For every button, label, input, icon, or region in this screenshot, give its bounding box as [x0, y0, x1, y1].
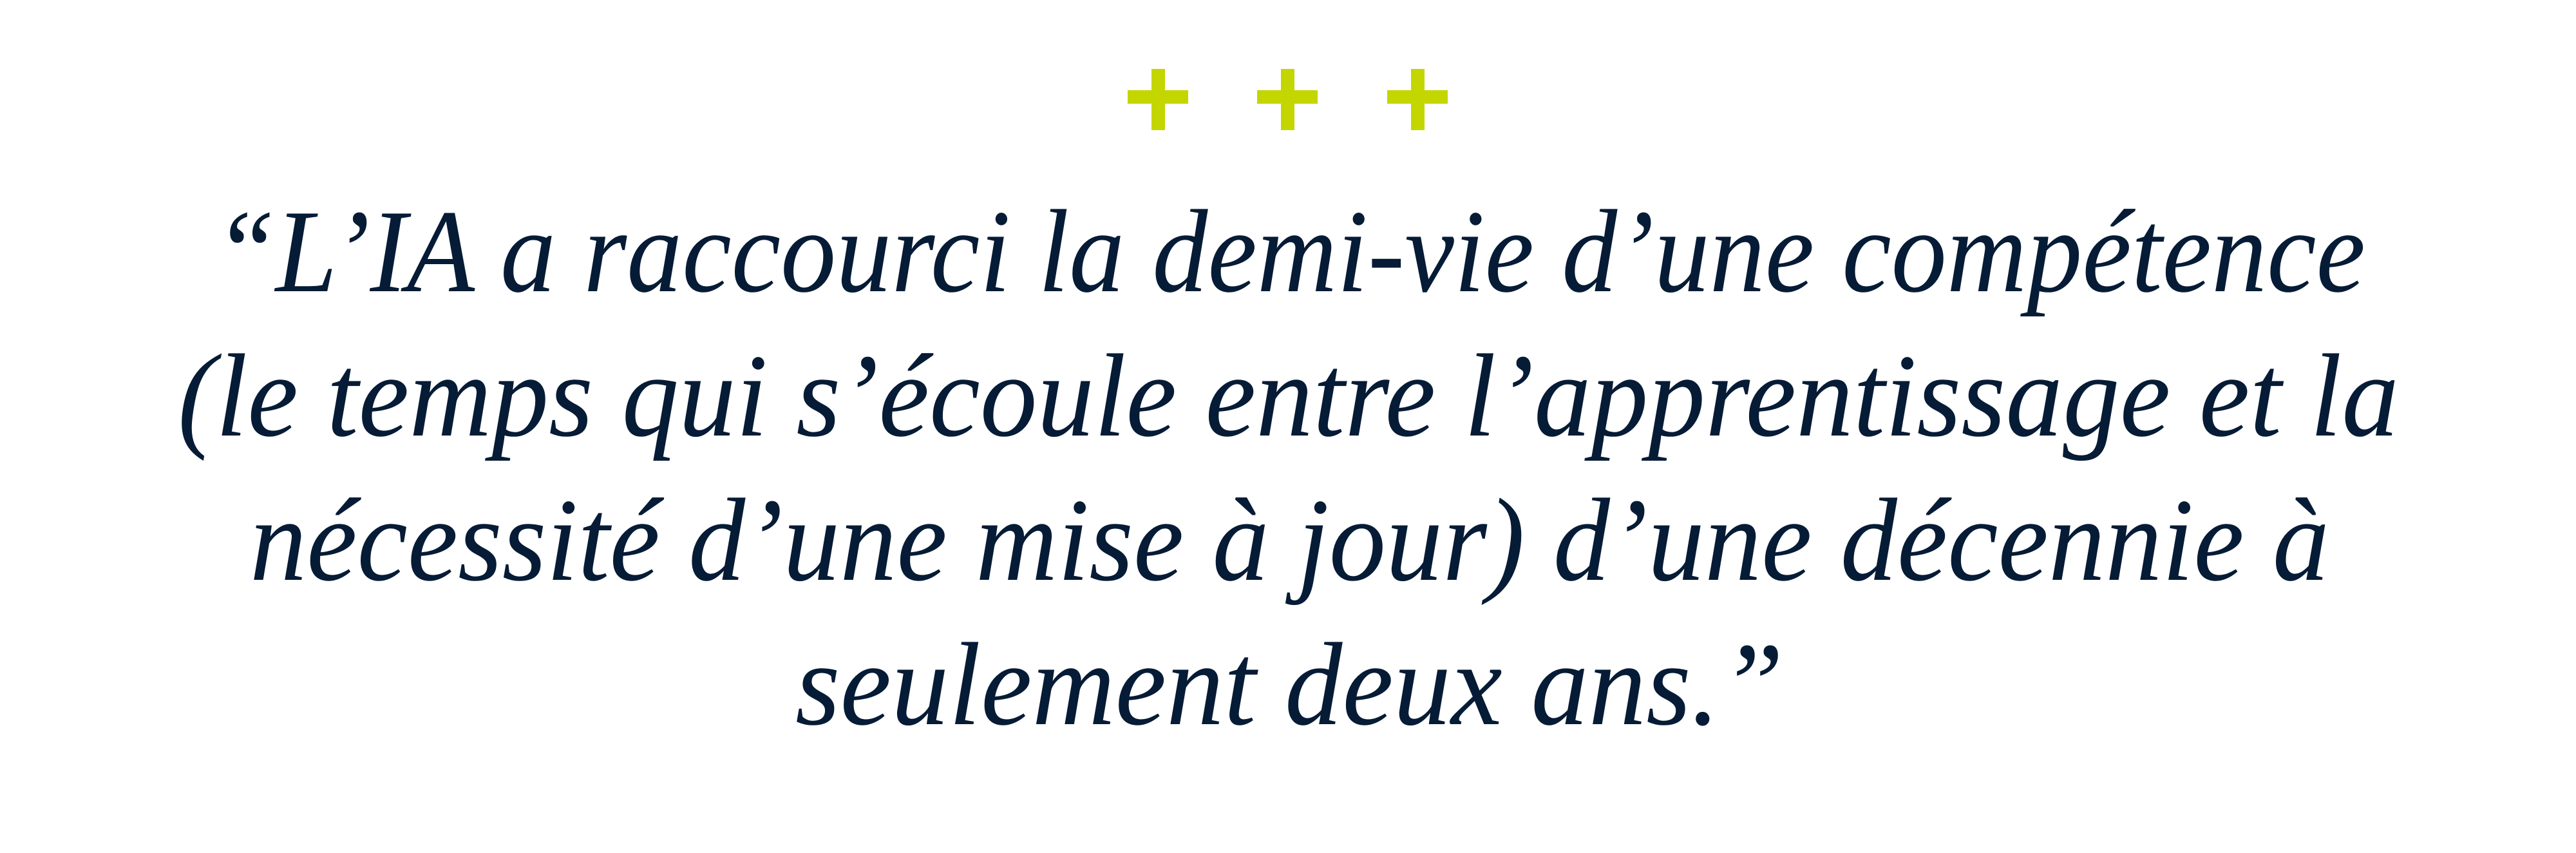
icon: three plus signs	[1128, 69, 1448, 130]
quote text: seulement deux ans.”	[795, 618, 1784, 750]
quote text	[178, 186, 2399, 750]
quote text: “L’IA a raccourci la demi-vie d’une compétence	[214, 186, 2365, 317]
quote text: (le temps qui s’écoule entre l’apprentissage et la	[178, 330, 2399, 461]
quote text: nécessité d’une mise à jour) d’une décennie à	[250, 474, 2329, 606]
